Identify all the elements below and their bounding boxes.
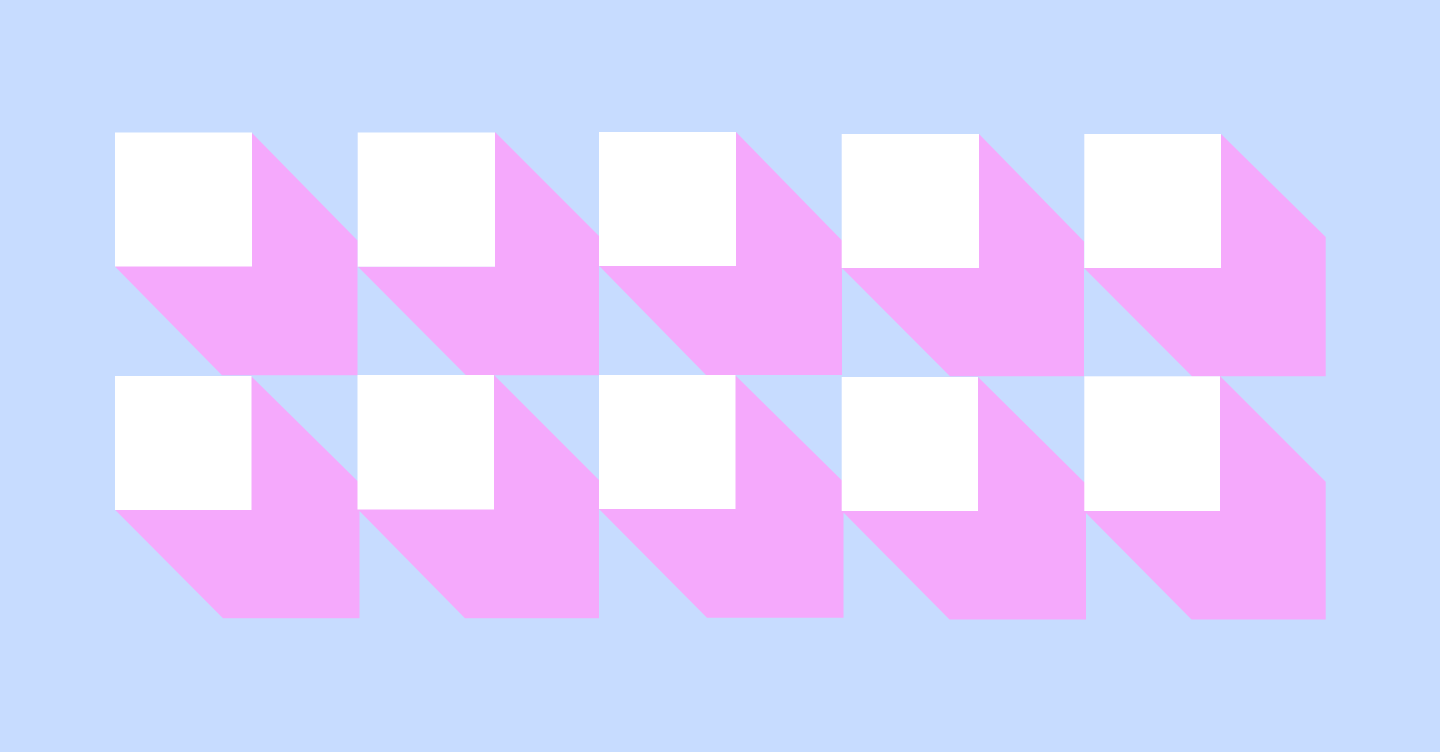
tile: row 1 column 5 bbox=[1084, 134, 1326, 376]
tile: row 2 column 1 bbox=[115, 376, 360, 618]
tile: row 1 column 3 bbox=[599, 132, 842, 375]
tile: row 2 column 2 bbox=[358, 375, 599, 618]
tile: row 2 column 4 bbox=[842, 377, 1086, 620]
tile: row 2 column 5 bbox=[1084, 376, 1326, 620]
tile: row 2 column 3 bbox=[599, 375, 844, 618]
tile: row 1 column 4 bbox=[842, 134, 1084, 376]
tile: row 1 column 2 bbox=[358, 132, 599, 375]
tile: row 1 column 1 bbox=[115, 132, 358, 375]
